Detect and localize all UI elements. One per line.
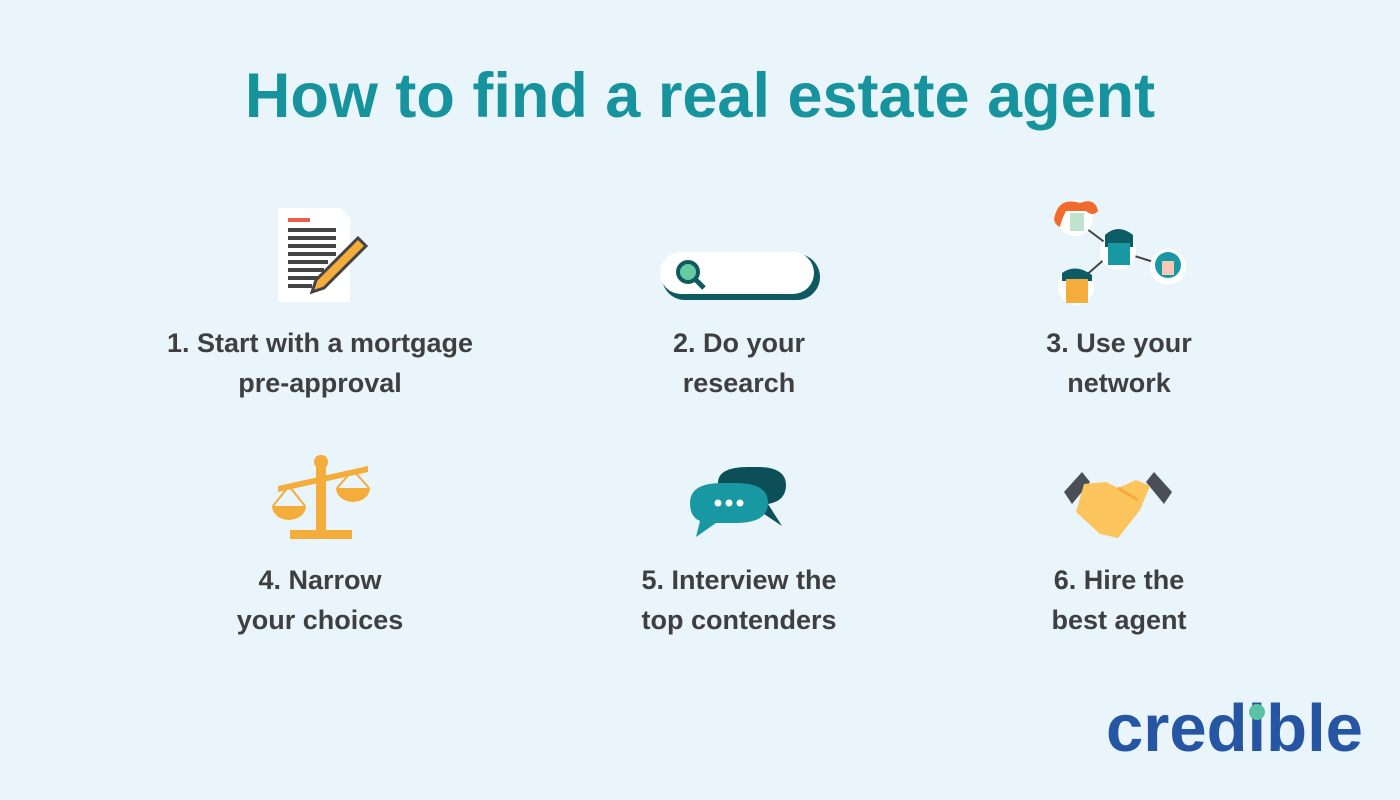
label 1 <box>167 328 473 398</box>
label 2: research <box>683 368 795 398</box>
label 3 <box>1046 328 1192 398</box>
label 3: network <box>1067 368 1171 398</box>
title: How to find a real estate agent <box>245 61 1155 131</box>
icon: chat bubbles <box>690 467 786 537</box>
icon: network of people <box>1054 200 1186 305</box>
label 3: 3. Use your <box>1046 328 1192 358</box>
label 6: 6. Hire the <box>1054 565 1184 595</box>
label 1: pre-approval <box>238 368 402 398</box>
label 4: 4. Narrow <box>258 565 382 595</box>
label 1: 1. Start with a mortgage <box>167 328 473 358</box>
label 5 <box>641 565 837 635</box>
label 2: 2. Do your <box>673 328 805 358</box>
icon: search bar <box>660 252 820 300</box>
label 4: your choices <box>237 605 403 635</box>
icon: handshake <box>1064 472 1172 538</box>
label 5: 5. Interview the <box>641 565 837 595</box>
icon: document with pencil <box>278 208 368 302</box>
logo: credible: credible <box>1106 691 1363 766</box>
label 5: top contenders <box>641 605 836 635</box>
icon: scale <box>272 455 370 539</box>
label 6 <box>1051 565 1187 635</box>
label 6: best agent <box>1051 605 1187 635</box>
label 4 <box>237 565 403 635</box>
label 2 <box>673 328 805 398</box>
